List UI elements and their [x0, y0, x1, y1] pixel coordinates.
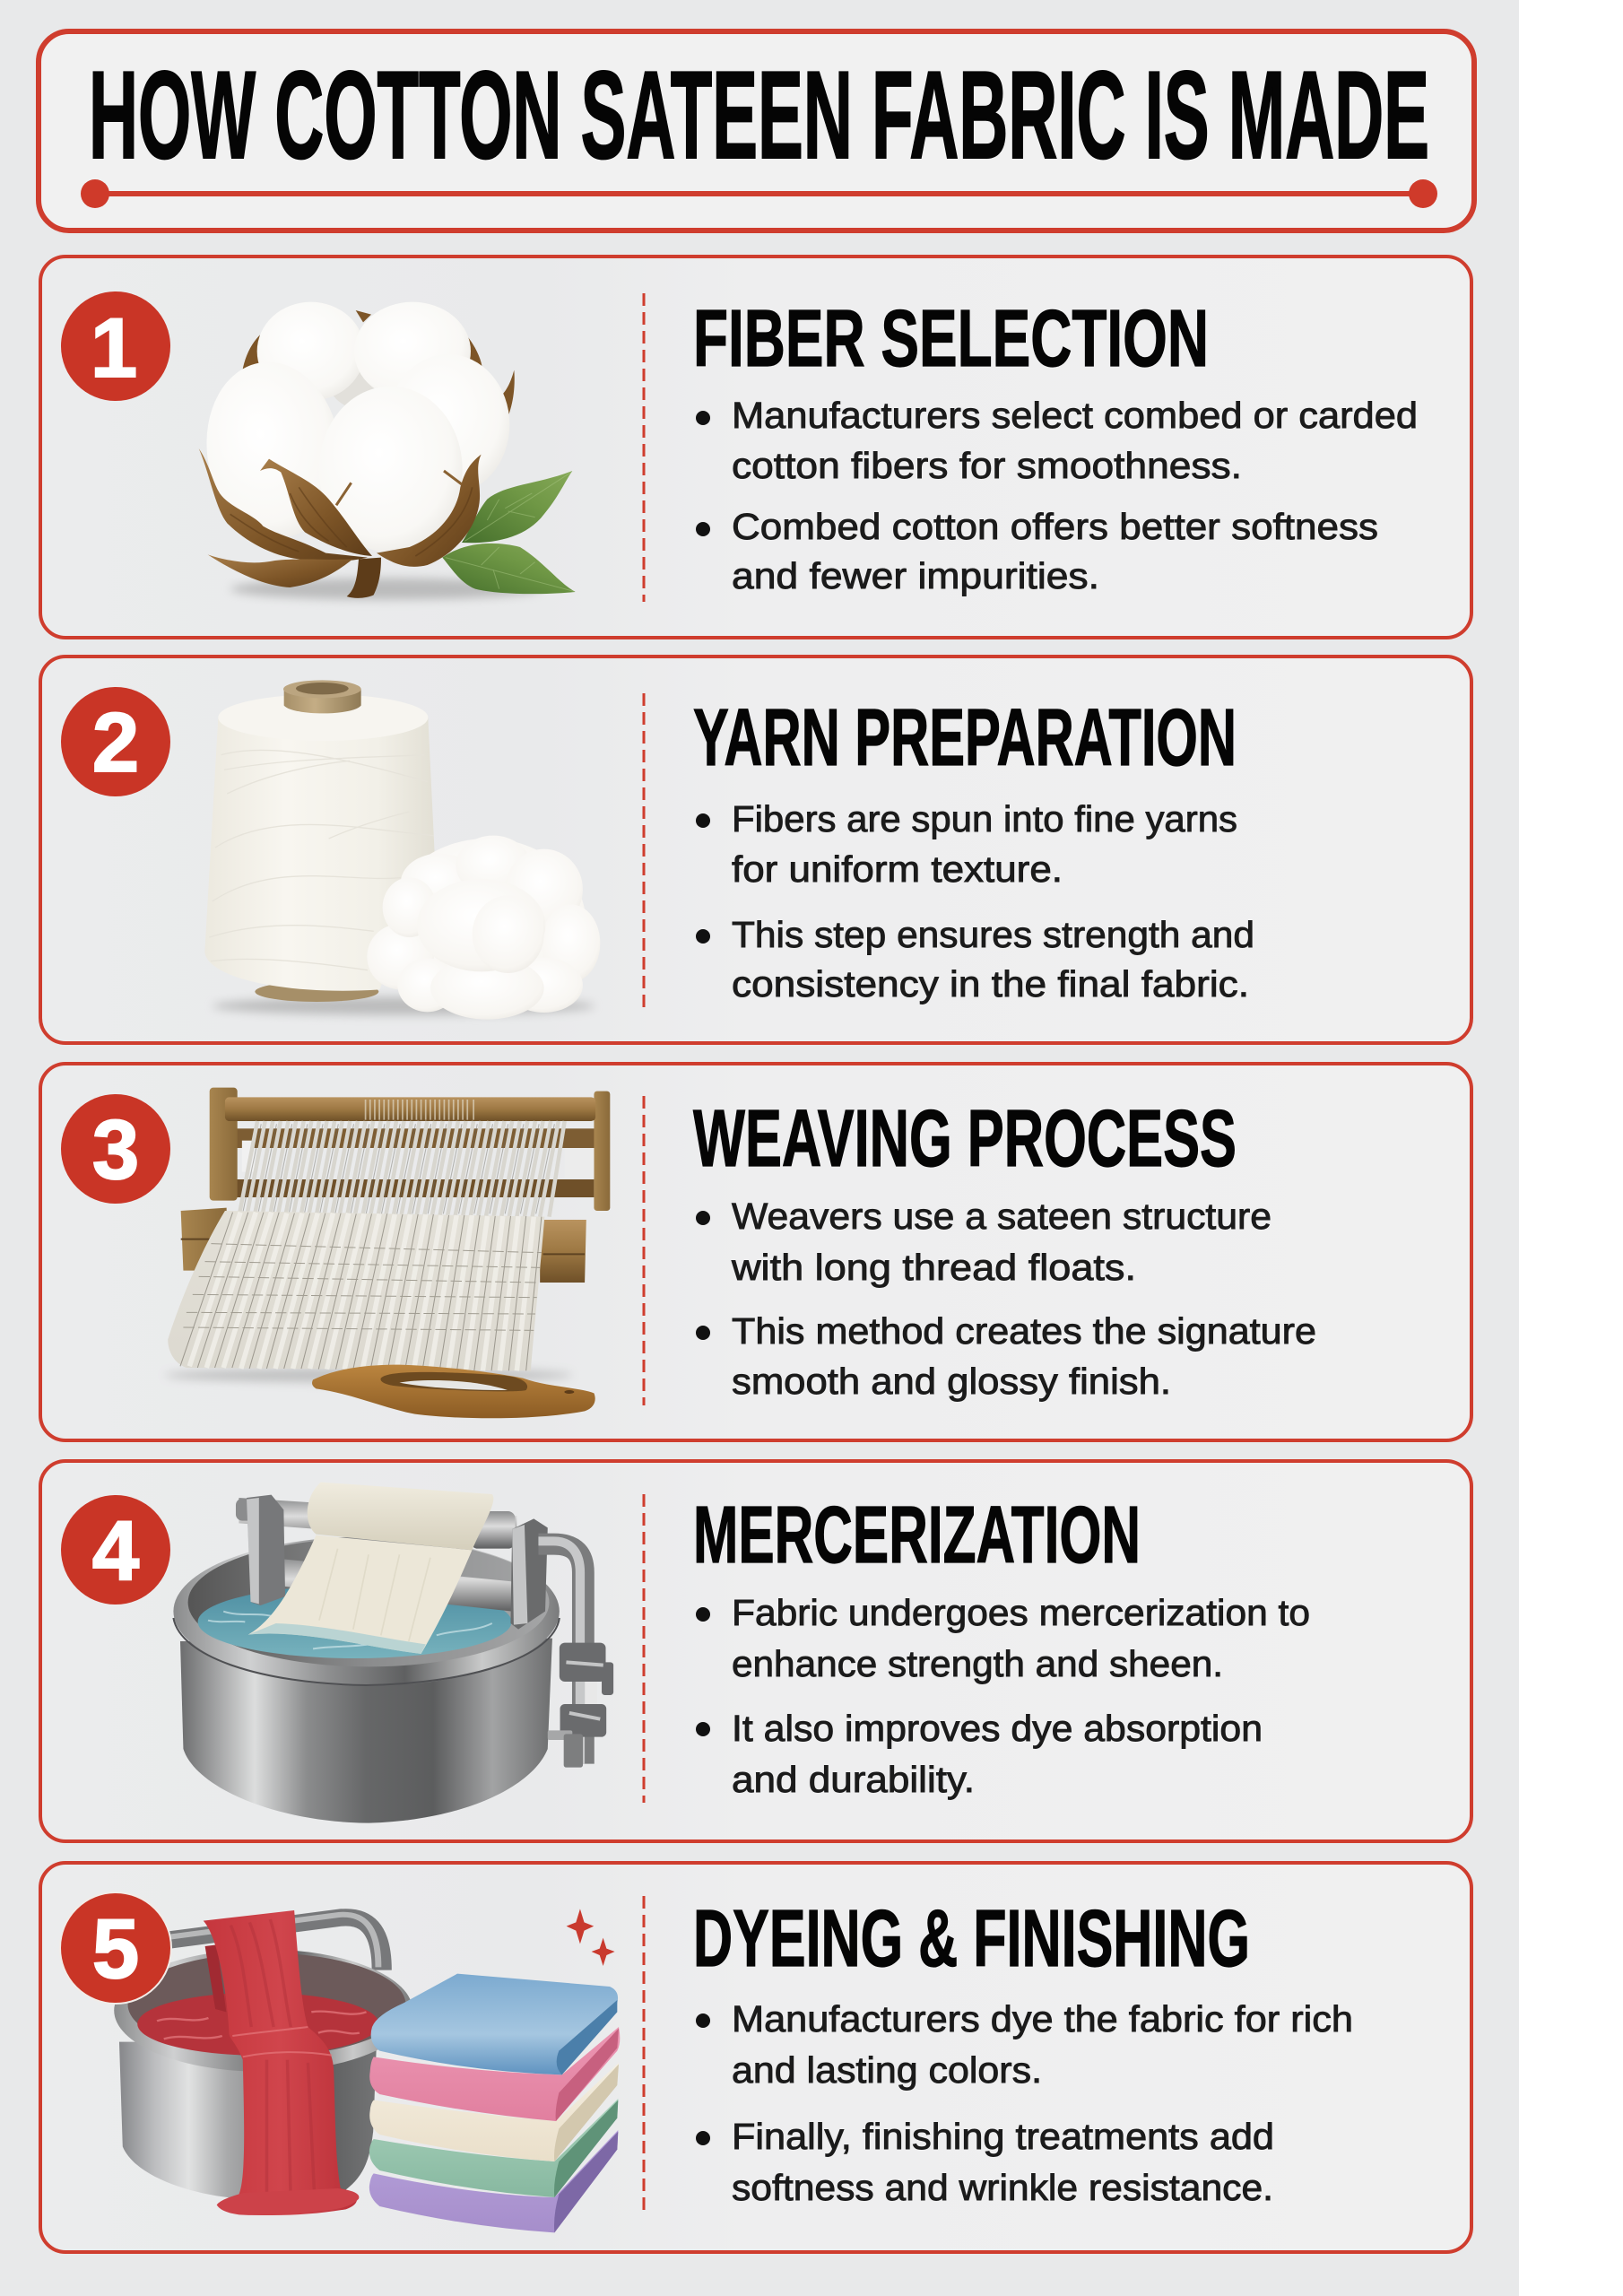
bullet list step 4: and durability.	[732, 1759, 975, 1800]
number badge 1	[61, 291, 170, 401]
number badge 5: 5	[92, 1901, 139, 1996]
number badge 2: 2	[92, 695, 139, 789]
bullet list step 5: and lasting colors.	[732, 2049, 1042, 2091]
heading: fiber selection: FIBER SELECTION	[693, 294, 1209, 384]
number badge 3: 3	[92, 1102, 139, 1196]
number badge 2	[61, 687, 170, 796]
bullet list step 1: Manufacturers select combed or carded	[732, 395, 1418, 436]
bullet list step 1: Combed cotton offers better softness	[732, 506, 1378, 547]
panel: step 4 mercerization	[40, 1461, 1471, 1841]
bullet list step 5: Manufacturers dye the fabric for rich	[732, 1998, 1353, 2039]
panel: step 5 dyeing and finishing	[40, 1863, 1471, 2252]
title underline with end dots	[81, 179, 1437, 208]
bullet list step 1: cotton fibers for smoothness.	[732, 445, 1242, 486]
panel: step 2 yarn preparation	[40, 657, 1471, 1043]
bullet list step 2: for uniform texture.	[732, 848, 1063, 890]
icon: yarn cone and cotton tuft	[204, 680, 600, 1020]
icon: dye pot with folded fabric stack and sparkles	[114, 1909, 620, 2232]
bullet list step 2: consistency in the final fabric.	[732, 963, 1249, 1004]
bullet list step 3: This method creates the signature	[732, 1310, 1316, 1352]
bullet list step 3: Weavers use a sateen structure	[732, 1196, 1271, 1237]
number badge 3	[61, 1094, 170, 1204]
heading: dyeing and finishing: DYEING & FINISHING	[693, 1894, 1250, 1984]
heading: yarn preparation: YARN PREPARATION	[693, 693, 1237, 783]
icon: steel mercerizing tank with roller	[173, 1483, 613, 1823]
bullet list step 3	[696, 1196, 1316, 1402]
bullet list step 2: This step ensures strength and	[732, 914, 1254, 955]
heading: weaving process: WEAVING PROCESS	[693, 1094, 1237, 1184]
title banner	[39, 31, 1474, 230]
panel: step 1 fiber selection	[40, 257, 1471, 638]
bullet list step 1: and fewer impurities.	[732, 555, 1099, 596]
bullet list step 4: Fabric undergoes mercerization to	[732, 1592, 1310, 1633]
bullet list step 4: It also improves dye absorption	[732, 1708, 1263, 1749]
number badge 4: 4	[92, 1503, 139, 1597]
bullet list step 4	[696, 1592, 1310, 1800]
bullet list step 2	[696, 798, 1254, 1004]
bullet list step 3: smooth and glossy finish.	[732, 1361, 1171, 1402]
heading: mercerization: MERCERIZATION	[693, 1491, 1141, 1580]
bullet list step 5: Finally, finishing treatments add	[732, 2116, 1274, 2157]
bullet list step 4: enhance strength and sheen.	[732, 1643, 1223, 1684]
bullet list step 5: softness and wrinkle resistance.	[732, 2167, 1273, 2208]
icon: cotton boll	[195, 302, 576, 600]
icon: loom with shuttle	[165, 1088, 610, 1418]
bullet list step 5	[696, 1998, 1353, 2208]
bullet list step 3: with long thread floats.	[731, 1247, 1136, 1288]
number badge 4	[61, 1495, 170, 1605]
number badge 1: 1	[91, 300, 137, 395]
number badge 5	[60, 1892, 171, 2004]
bullet list step 2: Fibers are spun into fine yarns	[732, 798, 1237, 839]
panel: step 3 weaving process	[40, 1064, 1471, 1440]
bullet list step 1	[696, 395, 1418, 596]
